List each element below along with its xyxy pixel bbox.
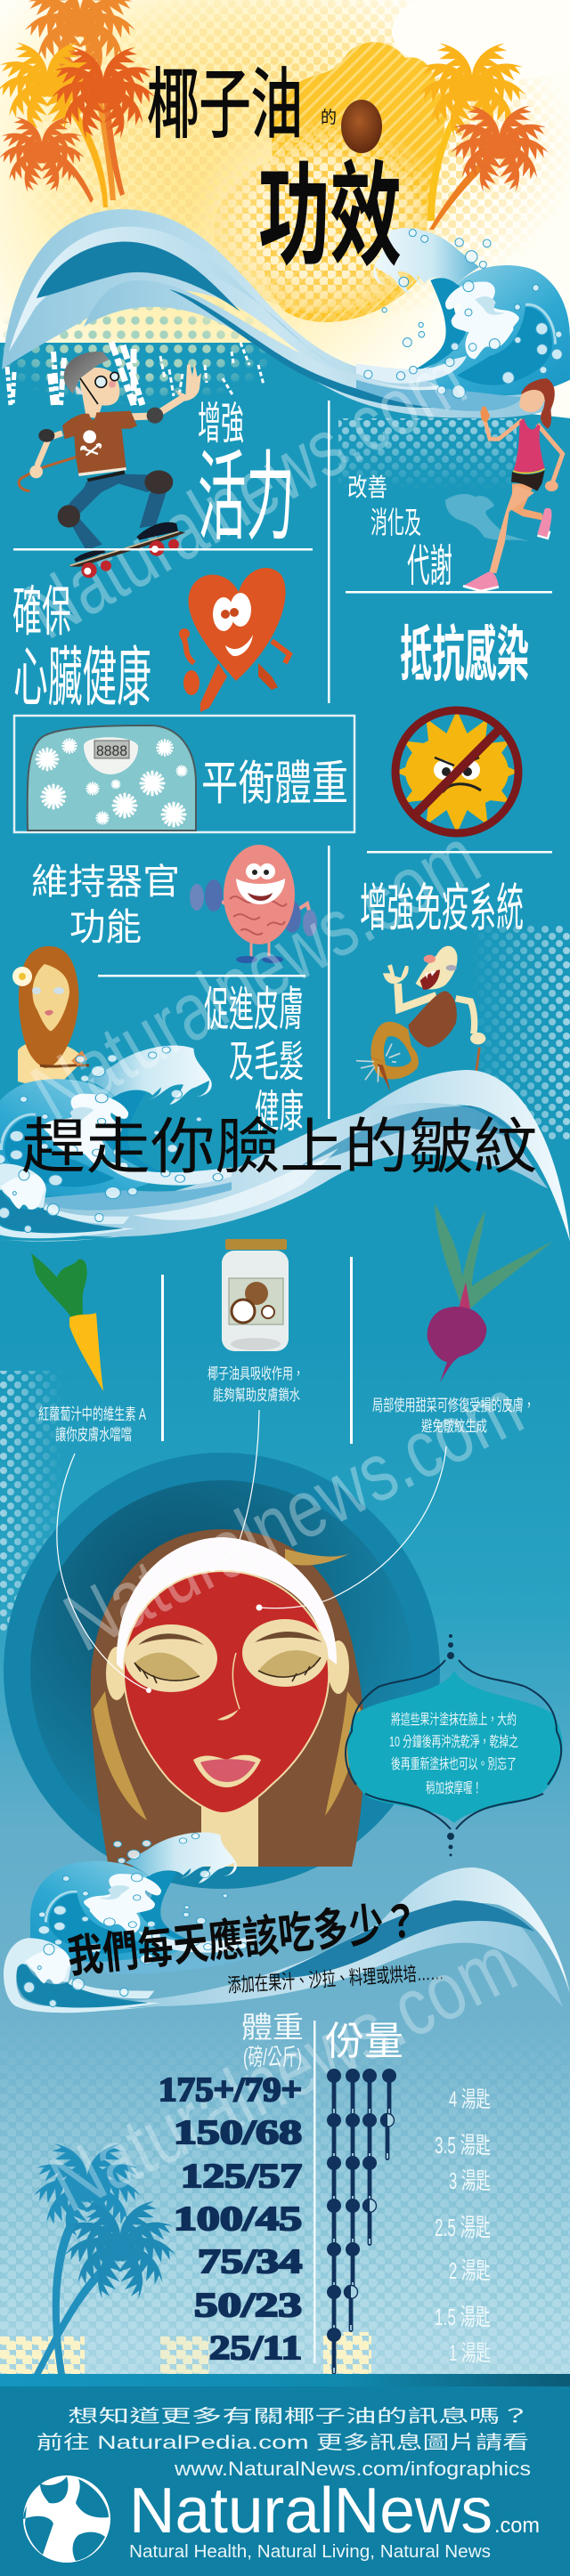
callout text bbox=[389, 1711, 518, 1796]
logo: wordmark: Natural Health, Natural Living, Natural News bbox=[129, 2542, 491, 2562]
icon: brain with dumbbells bbox=[190, 845, 317, 963]
text: carrot caption: 讓你皮膚水噹噹 bbox=[55, 1426, 132, 1444]
table: spoon amounts bbox=[435, 2087, 491, 2366]
divider lines: benefits grid bbox=[13, 401, 552, 1119]
icon: skateboarding old man bbox=[19, 352, 201, 578]
table: spoon amounts: 4 湯匙 bbox=[449, 2087, 491, 2112]
text: carrot caption bbox=[38, 1405, 146, 1444]
heading: digestion and metabolism: 改善 bbox=[347, 474, 387, 501]
top wave bbox=[2, 209, 552, 418]
heading: body weight: (磅/公斤) bbox=[243, 2044, 302, 2070]
face mask illustration bbox=[4, 1453, 440, 1889]
icon: carrot bbox=[31, 1253, 103, 1391]
halftone left side bbox=[0, 1371, 62, 1638]
icon: woman with long hair bbox=[12, 946, 89, 1090]
icon: bathroom scale bbox=[28, 725, 196, 830]
title: 功效 bbox=[258, 153, 402, 279]
table: weight column: 125/57 bbox=[181, 2158, 302, 2195]
text: more information bbox=[37, 2406, 531, 2480]
icon: old man running with cane bbox=[354, 946, 485, 1107]
table: weight column: 50/23 bbox=[194, 2287, 302, 2324]
heading: boost energy bbox=[198, 399, 295, 553]
title: 椰子油 bbox=[147, 62, 303, 148]
heading: balance weight: 平衡體重 bbox=[201, 757, 348, 810]
halftone near runner bbox=[338, 418, 517, 490]
text: oil caption: 能夠幫助皮膚鎖水 bbox=[213, 1387, 300, 1404]
table: spoon amounts: 1 湯匙 bbox=[449, 2341, 491, 2366]
table: spoon amounts: 3.5 湯匙 bbox=[435, 2132, 491, 2159]
heading: how much per day: 我們每天應該吃多少？ bbox=[65, 1896, 421, 1982]
table divider bbox=[314, 2021, 315, 2363]
wave curl with foam bbox=[356, 228, 570, 411]
heading: how much per day: 添加在果汁、沙拉、料理或烘培…… bbox=[227, 1961, 444, 1997]
heading: organ function bbox=[31, 863, 180, 948]
callout lines from ingredients to face bbox=[57, 1410, 446, 1693]
text: beet caption bbox=[372, 1397, 534, 1435]
icon: blue palm trees bbox=[33, 2136, 176, 2374]
table: spoon amounts: 1.5 湯匙 bbox=[435, 2304, 491, 2330]
logo: globe bbox=[23, 2475, 110, 2563]
heading: banish wrinkles: 趕走你臉上的皺紋 bbox=[21, 1114, 538, 1181]
heading: body weight: 體重 bbox=[241, 2011, 304, 2044]
logo: wordmark: NaturalNews bbox=[129, 2475, 493, 2547]
text: more information: 想知道更多有關椰子油的訊息嗎？ bbox=[68, 2406, 531, 2426]
table: weight column: 75/34 bbox=[198, 2243, 302, 2280]
heading: heart health: 心臟健康 bbox=[13, 642, 151, 714]
table: spoon amounts: 2.5 湯匙 bbox=[435, 2214, 491, 2241]
heading: digestion and metabolism: 代謝 bbox=[407, 541, 452, 591]
bottom wave bbox=[47, 1867, 570, 2012]
halftone right side bbox=[472, 926, 570, 1139]
halftone lower background bbox=[0, 2066, 570, 2374]
heading: skin and hair: 及毛髮 bbox=[229, 1039, 304, 1086]
icon: no germs sign bbox=[395, 710, 518, 833]
text: more information: www.NaturalNews.com/infographics bbox=[174, 2458, 531, 2480]
left palm trees bbox=[0, 0, 156, 207]
heading: skin and hair bbox=[204, 984, 304, 1137]
table: weight column bbox=[159, 2011, 304, 2367]
icon: running woman bbox=[445, 378, 563, 591]
icon: coconut bbox=[341, 100, 382, 153]
right palm trees bbox=[418, 36, 550, 230]
heading: digestion and metabolism: 消化及 bbox=[370, 506, 421, 540]
heading: skin and hair: 促進皮膚 bbox=[204, 984, 304, 1036]
left wave curl bbox=[0, 1045, 232, 1211]
heading: how much per day bbox=[65, 1896, 444, 1997]
text: more information: 前往 NaturalPedia.com 更多訊息圖片請看 bbox=[37, 2433, 529, 2453]
small wave curl bbox=[4, 1938, 160, 2013]
table: weight column: 100/45 bbox=[174, 2200, 302, 2238]
heading: digestion and metabolism bbox=[347, 474, 452, 591]
dividers between ingredients bbox=[161, 1257, 353, 1444]
icons: spoons by row bbox=[327, 2069, 396, 2375]
heading: organ function: 功能 bbox=[69, 906, 142, 948]
icon: running heart bbox=[179, 568, 289, 712]
panel: balance weight bbox=[14, 716, 354, 832]
text: carrot caption: 紅蘿蔔汁中的維生素 A bbox=[38, 1405, 146, 1423]
table: weight column: 175+/79+ bbox=[159, 2071, 302, 2109]
heading: boost energy: 增強 bbox=[198, 399, 244, 449]
table: spoon amounts: 2 湯匙 bbox=[449, 2257, 491, 2284]
icon: beetroot bbox=[428, 1203, 552, 1382]
table: spoon amounts: 3 湯匙 bbox=[449, 2167, 491, 2194]
heading: skin and hair: 健康 bbox=[255, 1087, 304, 1137]
title: 的 bbox=[321, 108, 337, 127]
title bbox=[147, 62, 402, 279]
middle wave bbox=[0, 1070, 570, 1242]
heading: organ function: 維持器官 bbox=[31, 863, 180, 902]
heading: body weight bbox=[241, 2011, 304, 2070]
heading: heart health bbox=[12, 581, 151, 714]
table: weight column: 150/68 bbox=[174, 2114, 302, 2151]
small wave curl left bbox=[0, 1163, 135, 1238]
icon: bathroom scale: 8888 bbox=[96, 742, 127, 759]
bottom wave curl bbox=[30, 1832, 255, 1974]
callout: how to apply bbox=[346, 1634, 563, 1857]
table: weight column: 25/11 bbox=[209, 2329, 302, 2367]
logo: wordmark: .com bbox=[494, 2514, 540, 2538]
panel: footer bbox=[0, 2374, 570, 2576]
heading: heart health: 確保 bbox=[12, 581, 71, 642]
text: beet caption: 避免皺紋生成 bbox=[421, 1418, 487, 1435]
text: oil caption bbox=[208, 1365, 304, 1404]
infographic canvas: 活力 bbox=[198, 443, 295, 553]
icon: coconut oil jar bbox=[222, 1239, 289, 1351]
callout text: 稍加按摩喔！ bbox=[426, 1780, 482, 1796]
text: oil caption: 椰子油具吸收作用， bbox=[208, 1365, 304, 1382]
heading: serving: 份量 bbox=[325, 2020, 403, 2063]
